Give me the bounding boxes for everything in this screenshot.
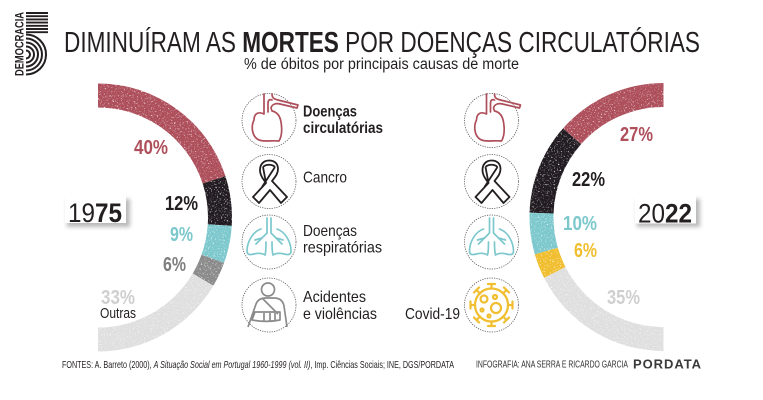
credits: INFOGRAFIA: ANA SERRA E RICARDO GARCIA xyxy=(476,360,628,370)
value 22%: 22% xyxy=(572,168,605,191)
label: Doenças circulatórias: circulatórias xyxy=(303,120,383,137)
segment: respiratory 10% xyxy=(530,213,558,254)
value 10%: 10% xyxy=(563,212,597,235)
chart: 2022 half donut xyxy=(530,83,664,351)
logo stripes and arcs xyxy=(26,13,48,74)
icon: ribbon right xyxy=(464,154,518,208)
icon: lungs right xyxy=(464,215,518,269)
label: Doenças circulatórias xyxy=(303,104,383,137)
label: Acidentes e violências xyxy=(303,289,377,323)
logo: PORDATA: PORDATA xyxy=(633,356,702,372)
segment: cancer 12% xyxy=(203,176,232,226)
year badge 2022: 2022 xyxy=(638,198,692,228)
segment: others 35% xyxy=(544,267,664,351)
label: Acidentes e violências: e violências xyxy=(303,306,377,323)
segment: covid 6% xyxy=(535,248,565,278)
2022 values xyxy=(563,123,653,309)
value 40%: 40% xyxy=(134,136,168,159)
value 33%: 33% xyxy=(101,286,135,309)
sources: FONTES: A. Barreto (2000), A Situação Social em Portugal 1960-1999 (vol. II), Imp. Ciências Sociais; INE, DGS/PORDATA xyxy=(62,360,454,371)
segment: others 33% xyxy=(98,273,213,352)
value 12%: 12% xyxy=(165,192,198,215)
icon: injured person xyxy=(242,278,296,332)
label Outras: Outras xyxy=(100,306,136,322)
logo: Democracia 5 xyxy=(14,12,48,76)
label: Cancro: Cancro xyxy=(303,170,347,186)
value 35%: 35% xyxy=(607,286,640,309)
icon: heart right xyxy=(464,94,520,148)
value 6%: 6% xyxy=(163,253,186,276)
subtitle: % de óbitos por principais causas de morte xyxy=(244,56,519,73)
label: Acidentes e violências: Acidentes xyxy=(303,289,366,306)
chart: 1975 half donut xyxy=(98,84,232,352)
value 6%: 6% xyxy=(574,239,597,262)
icon: lungs left xyxy=(242,215,296,269)
segment: accidents 6% xyxy=(193,255,224,286)
segment: circulatory 27% xyxy=(563,83,664,144)
segment: respiratory 9% xyxy=(202,224,232,263)
label: Doenças respiratórias xyxy=(303,223,382,257)
year badge 1975: 1975 xyxy=(68,198,122,228)
label: Doenças respiratórias: respiratórias xyxy=(303,240,382,257)
label: Doenças circulatórias: Doenças xyxy=(303,104,357,120)
icon: ribbon left xyxy=(242,154,296,208)
label: Doenças respiratórias: Doenças xyxy=(303,223,357,240)
icon: heart left xyxy=(242,94,298,148)
label: Covid-19: Covid-19 xyxy=(405,306,460,323)
value 9%: 9% xyxy=(170,223,193,246)
icon: coronavirus xyxy=(464,278,518,332)
value 27%: 27% xyxy=(620,123,653,146)
segment: cancer 22% xyxy=(530,128,581,214)
segment: circulatory 40% xyxy=(98,84,225,184)
1975 values xyxy=(100,136,198,322)
